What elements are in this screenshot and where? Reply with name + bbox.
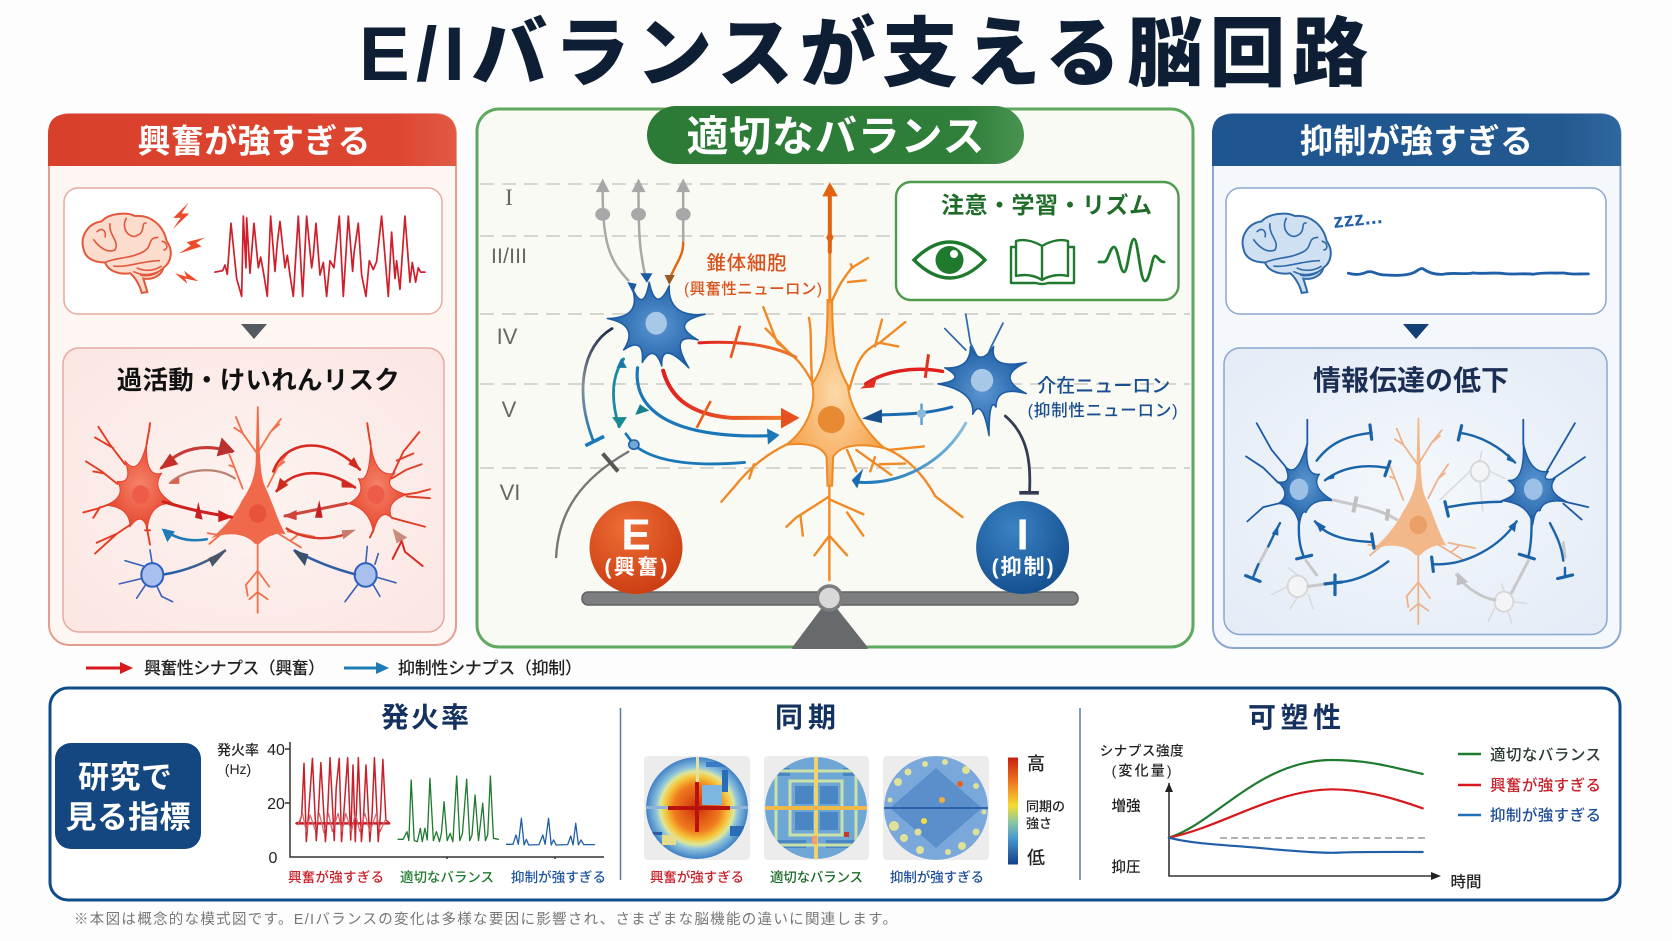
- legend: synapse types: [86, 659, 582, 678]
- ball: I inhibition: [976, 501, 1069, 594]
- labels: states: 興奮が強すぎる: [650, 869, 744, 885]
- neuron: right excitatory: [348, 423, 430, 537]
- heatmap: balanced: [764, 756, 869, 860]
- badge: research indicators: [55, 743, 201, 849]
- diagram: neural circuit: [556, 179, 1039, 580]
- diagram: suppressed network: [1246, 418, 1588, 624]
- seesaw: [582, 586, 1078, 648]
- section: firing rate: 発火率: [381, 702, 469, 733]
- axis: y label and ticks: 0: [269, 850, 278, 867]
- label: pyramidal cell: 錐体細胞: [706, 252, 786, 274]
- arrows: ascending inputs: [595, 179, 691, 293]
- diagram: overactive network: [83, 406, 430, 613]
- legend: curves: 抑制が強すぎる: [1490, 806, 1601, 824]
- neurons: inhibitory: [119, 546, 396, 602]
- arrows: inhibitory connections: [162, 529, 355, 574]
- labels: cortical layers: [491, 185, 527, 505]
- arrows: grey weakened pathways: [1255, 496, 1565, 600]
- section: firing rate: [217, 702, 606, 885]
- neuron: inhibitory interneuron: [938, 314, 1026, 436]
- icon: overheated brain: [83, 214, 171, 293]
- neuron: excitatory top left: [607, 282, 705, 368]
- neurons: silent: [1272, 452, 1527, 623]
- legend: synapse types: 抑制性シナプス（抑制）: [398, 659, 582, 678]
- axis labels: シナプス強度: [1100, 744, 1184, 758]
- labels: states: 抑制が強すぎる: [890, 869, 984, 885]
- badge: research indicators: 研究で: [78, 760, 172, 795]
- neuron: left excitatory: [83, 423, 173, 554]
- axis: y label and ticks: 発火率: [217, 742, 259, 758]
- chart: excited firing: [296, 758, 390, 842]
- label: interneuron: [1028, 375, 1178, 420]
- neuron: left inhibitory: [1246, 420, 1333, 525]
- panel: inhibition too strong: [1212, 114, 1621, 648]
- neuron: pyramidal cell: [721, 182, 962, 580]
- ball: E excitation: (興奮): [604, 556, 668, 579]
- arrows: excitatory synapses: [663, 326, 942, 429]
- card: hyperactivity and seizure risk: [63, 348, 444, 632]
- chart: synaptic strength over time: [1165, 760, 1441, 880]
- arrow: down: [1403, 324, 1429, 339]
- panel: appropriate balance: [477, 106, 1193, 648]
- axis labels: 抑圧: [1112, 859, 1140, 876]
- arrows: inhibitory T bars: [1246, 425, 1573, 595]
- header: inhibition: [1212, 114, 1621, 166]
- label: interneuron: 介在ニューロン: [1037, 375, 1170, 397]
- axis: y label and ticks: 40: [267, 742, 285, 759]
- arrow: down: [241, 324, 267, 339]
- labels: states: 興奮が強すぎる: [288, 869, 384, 885]
- card: attention learning rhythm: [896, 182, 1178, 300]
- label: pyramidal cell: (興奮性ニューロン): [684, 280, 822, 298]
- chart: high amplitude EEG trace: [215, 216, 425, 296]
- labels: cortical layers: V: [502, 397, 517, 422]
- chart: balanced firing: [398, 776, 498, 842]
- axis labels: 増強: [1112, 797, 1141, 815]
- chart: suppressed firing: [506, 818, 594, 845]
- chart: flat trace: [1348, 268, 1588, 275]
- cortical layer lines: [480, 184, 1190, 468]
- legend: colour scale: 高: [1027, 754, 1045, 774]
- icon: sleepy brain: [1243, 214, 1331, 293]
- neuron: right inhibitory: [1502, 420, 1588, 525]
- ball: I inhibition: (抑制): [992, 556, 1054, 579]
- axis: y label and ticks: (Hz): [225, 761, 251, 777]
- labels: states: [288, 869, 606, 885]
- legend: curves: [1458, 746, 1601, 824]
- label: pyramidal cell: [684, 252, 822, 298]
- heading: seizure risk: 過活動・けいれんリスク: [117, 367, 400, 395]
- card: hyperactive brain and EEG: [64, 188, 442, 314]
- neuron: central pyramidal: [1368, 418, 1475, 624]
- icon: eye: [914, 242, 985, 278]
- icon: open book: [1011, 240, 1074, 284]
- ball: E excitation: [590, 501, 682, 594]
- footnote: ※本図は概念的な模式図です。E/Iバランスの変化は多様な要因に影響され、さまざまな脳機能の違いに関連します。: [74, 910, 897, 928]
- header: balance: [647, 106, 1024, 164]
- axis: y label and ticks: 20: [267, 796, 285, 813]
- section: synchrony: [644, 702, 1065, 885]
- legend: colour scale: 強さ: [1026, 816, 1052, 831]
- labels: states: 適切なバランス: [400, 869, 494, 885]
- text: zzz: zzz...: [1332, 206, 1383, 233]
- legend: curves: 興奮が強すぎる: [1490, 776, 1601, 794]
- arrows: excitatory connections: [159, 437, 423, 566]
- header: excitation: 興奮が強すぎる: [138, 122, 370, 160]
- axis: y label and ticks: [217, 742, 285, 867]
- legend: curves: 適切なバランス: [1490, 746, 1601, 764]
- arrows: inhibitory synapses: [556, 329, 1039, 557]
- labels: states: 抑制が強すぎる: [511, 869, 606, 885]
- legend: colour scale: [1008, 754, 1065, 868]
- panel: excitation too strong: [48, 114, 456, 645]
- badge: research indicators: 見る指標: [66, 800, 190, 835]
- label: interneuron: (抑制性ニューロン): [1028, 401, 1178, 420]
- labels: cortical layers: II/III: [491, 245, 527, 268]
- legend: colour scale: 同期の: [1026, 799, 1065, 814]
- labels: states: 適切なバランス: [770, 869, 863, 885]
- section: synchrony: 同期: [775, 702, 836, 733]
- heatmap: inhibition too strong: [883, 756, 989, 860]
- neuron: central pyramidal: [208, 406, 314, 613]
- arrow: inhibitory: [344, 662, 389, 674]
- section: plasticity: [1100, 702, 1601, 891]
- header: inhibition: 抑制が強すぎる: [1300, 122, 1533, 160]
- heading: reduced transfer: 情報伝達の低下: [1313, 365, 1509, 396]
- section: plasticity: 可塑性: [1248, 702, 1341, 733]
- axis labels: 時間: [1450, 873, 1482, 891]
- labels: cortical layers: IV: [497, 324, 518, 349]
- axis labels: [1100, 744, 1482, 891]
- axis labels: (変化量): [1112, 762, 1172, 778]
- labels: states: [650, 869, 984, 885]
- icon: lightning bolts: [173, 202, 205, 284]
- card: attention learning rhythm: 注意・学習・リズム: [941, 192, 1152, 218]
- arrow: excitatory: [86, 662, 133, 674]
- header: balance: 適切なバランス: [686, 113, 984, 160]
- title: E/Iバランスが支える脳回路: [359, 12, 1368, 97]
- labels: cortical layers: VI: [500, 480, 520, 505]
- card: reduced information transfer: [1224, 348, 1607, 634]
- labels: cortical layers: I: [505, 185, 513, 210]
- panel: research indicators: [50, 688, 1620, 900]
- legend: colour scale: 低: [1027, 848, 1045, 868]
- ball: I inhibition: I: [1016, 510, 1029, 560]
- icon: rhythm wave: [1099, 239, 1164, 281]
- heatmap: excitation too strong: [644, 756, 750, 860]
- ball: E excitation: E: [621, 510, 651, 560]
- card: quiet brain and flat trace: [1226, 188, 1606, 314]
- header: excitation: [48, 114, 456, 166]
- legend: synapse types: 興奮性シナプス（興奮）: [144, 659, 325, 678]
